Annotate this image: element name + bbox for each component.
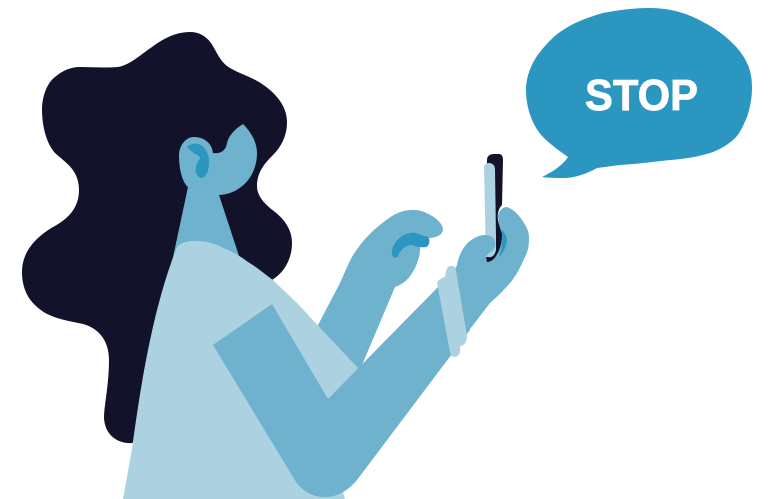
back forearm xyxy=(318,210,443,400)
phone xyxy=(484,154,503,262)
STOP text: STOP xyxy=(585,71,698,120)
thumb over phone xyxy=(457,235,495,280)
phone hand palm and lower fingers xyxy=(435,207,529,357)
shirt xyxy=(123,241,358,499)
back hand finger shadow xyxy=(392,233,429,258)
face and neck shape xyxy=(172,124,257,262)
front arm xyxy=(213,285,470,497)
phone body xyxy=(486,154,503,262)
bracelet xyxy=(437,266,467,357)
speech bubble xyxy=(526,8,752,178)
face, ear and neck xyxy=(172,124,257,262)
phone screen xyxy=(484,163,496,257)
back arm and hand xyxy=(318,210,443,400)
bubble shape xyxy=(526,8,752,178)
hand shadow behind phone xyxy=(499,230,507,257)
inner ear xyxy=(187,144,209,178)
hair xyxy=(22,32,292,443)
